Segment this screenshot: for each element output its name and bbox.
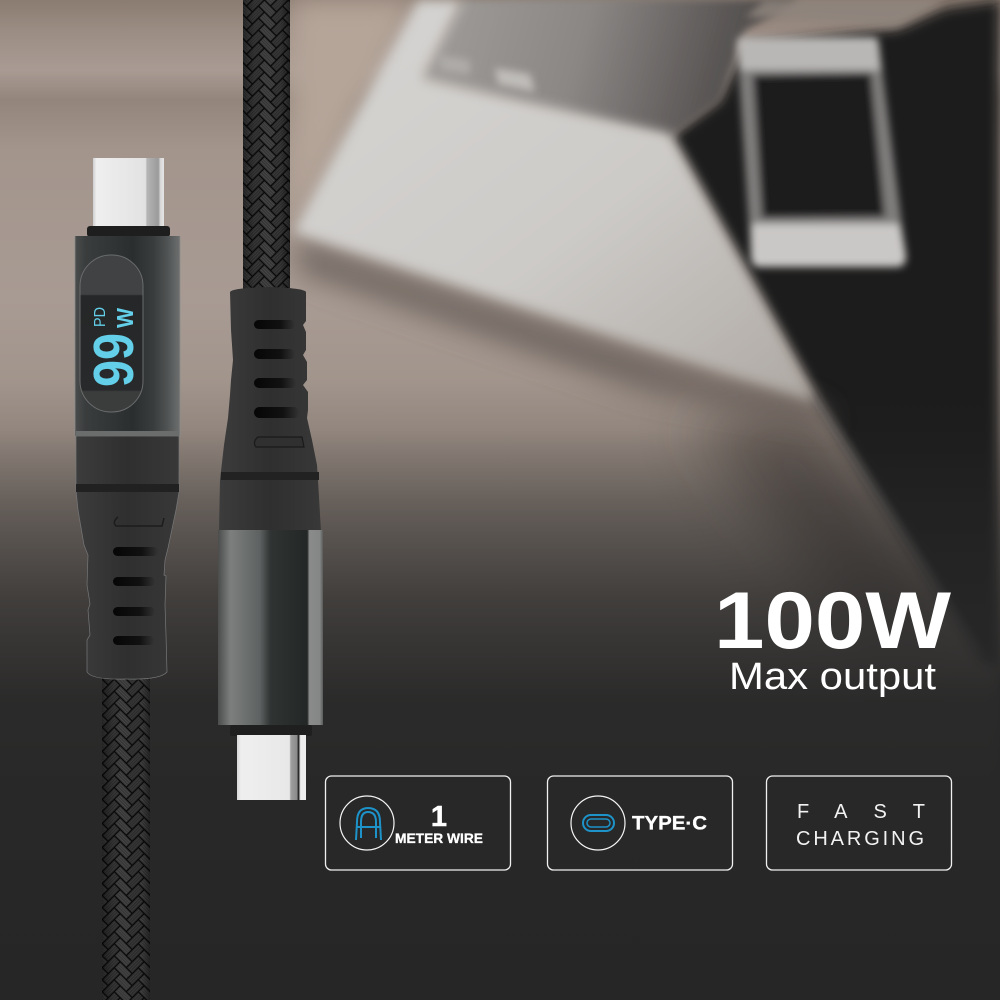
background: laptop deck [294, 0, 817, 402]
strain relief slots [113, 547, 158, 645]
strain relief slots [254, 320, 299, 418]
background: blurred keys [495, 68, 535, 92]
right rubber strain relief [219, 287, 321, 532]
background: laptop deck shadow [296, 240, 835, 425]
badge: Type-C [548, 776, 732, 870]
background: table edge highlight [817, 400, 980, 655]
left rubber strain relief [76, 431, 179, 679]
connector: left USB-C plug [87, 158, 170, 237]
text: CHARGING: CHARGING [796, 828, 924, 850]
background: laptop hinge strip [745, 0, 945, 27]
background: laptop keyboard [422, 0, 800, 138]
cable: right braided wire [243, 0, 290, 290]
icon: coiled wire [340, 796, 394, 850]
background: dark desk right side [670, 0, 1000, 1000]
text: FAST: FAST [797, 801, 925, 823]
display reading: W: W [112, 308, 138, 328]
display reading: 99: 99 [82, 333, 146, 387]
display reading: PD: PD [92, 307, 109, 327]
left metal body with display [75, 236, 180, 436]
headline: 100W: 100W [714, 576, 952, 666]
background: shadow beside table edge [690, 400, 960, 640]
text: 1: 1 [431, 801, 447, 833]
text: TYPE-C: TYPE·C [632, 814, 707, 834]
badge: 1 meter wire [326, 776, 510, 870]
icon: USB-C port [571, 796, 625, 850]
connector: right USB-C plug [237, 735, 306, 800]
text: METER WIRE: METER WIRE [395, 830, 483, 846]
background: blurred phone [737, 37, 906, 267]
cable: left braided wire [102, 676, 150, 1000]
display pill [80, 255, 146, 412]
right metal body [218, 530, 323, 736]
subheading: Max output: Max output [729, 656, 936, 698]
badge: Fast charging [766, 776, 952, 870]
